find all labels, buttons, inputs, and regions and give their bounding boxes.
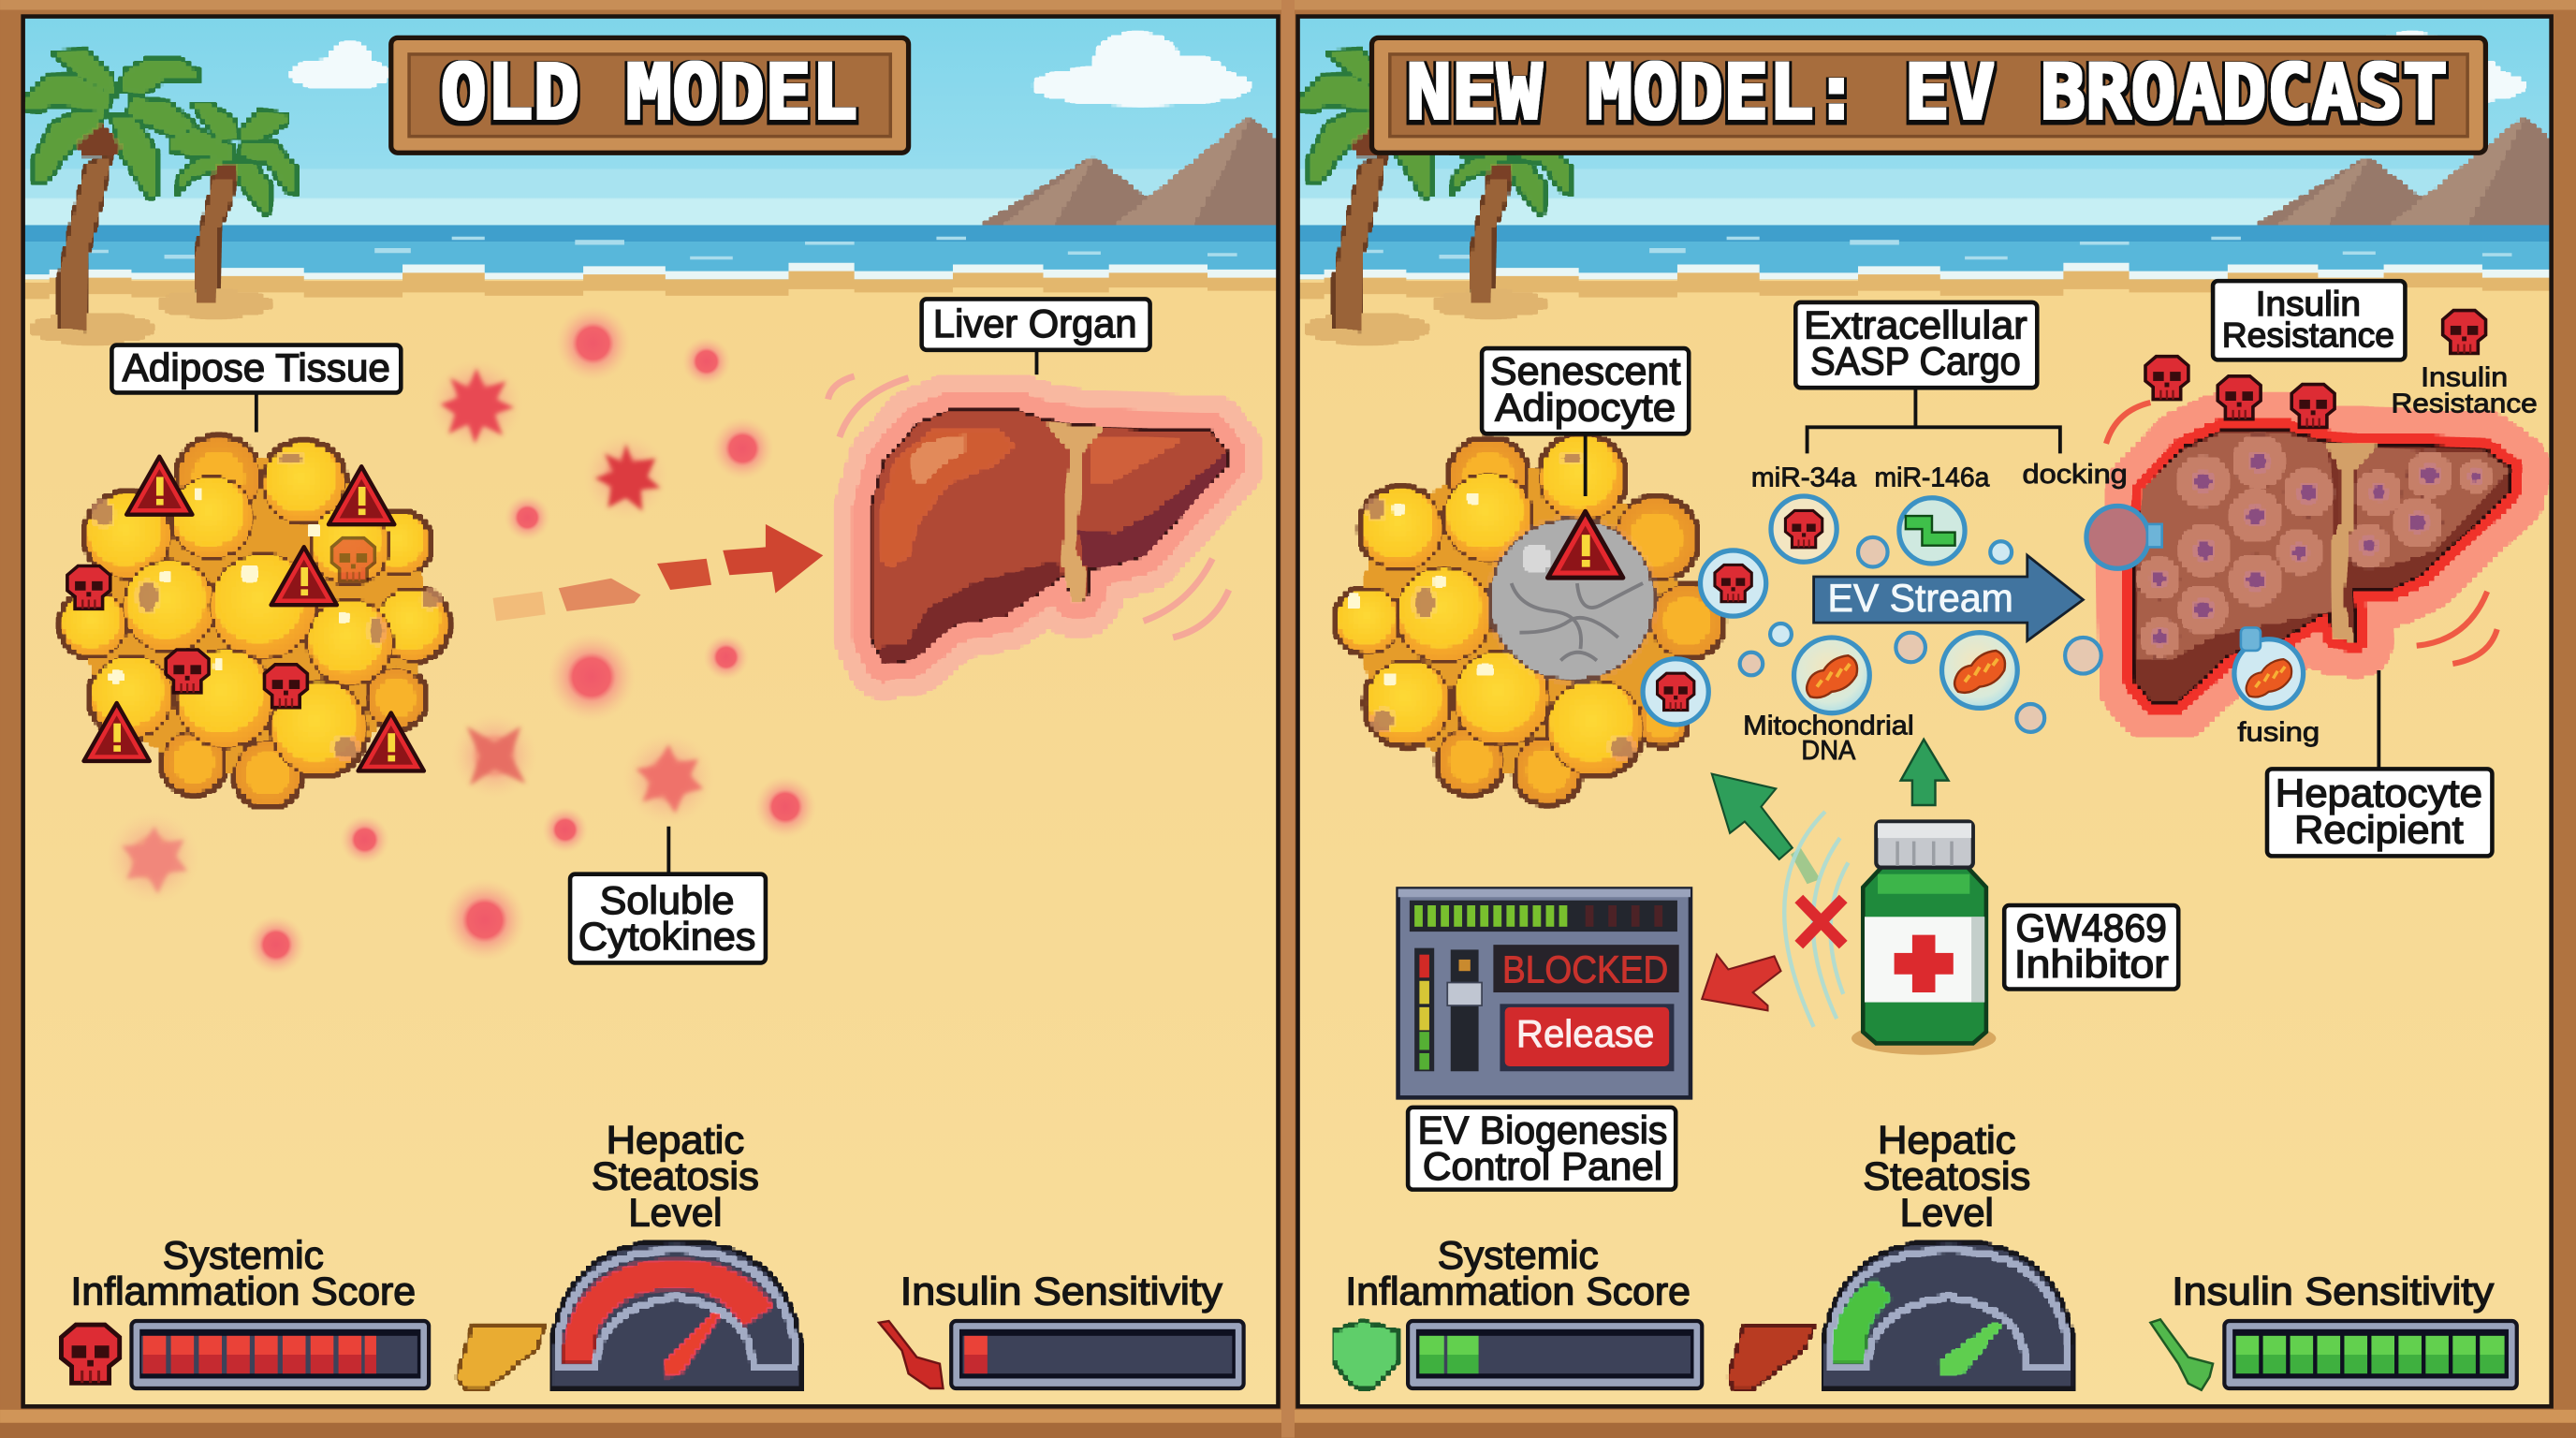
insulin bar: [951, 1321, 1244, 1388]
hud: insulin sensitivity (new): [2150, 1269, 2517, 1390]
hud: systemic inflammation score (new): Systemic: [1438, 1233, 1599, 1277]
senescent grey cell: [1490, 520, 1654, 681]
cargo labels: miR-146a: [1875, 462, 1990, 492]
cargo labels: Mitochondrial: [1743, 711, 1914, 741]
panel: new model: [1275, 17, 2576, 1413]
red X block mark: [1799, 899, 1843, 945]
label: insulin resistance text: Resistance: [2392, 389, 2538, 419]
beach background: [0, 17, 1347, 1413]
fusing vesicle: [2234, 627, 2304, 708]
skull icons over liver: [2145, 311, 2486, 427]
label: soluble cytokines: Soluble: [600, 878, 735, 922]
hud: hepatic steatosis gauge (new): Hepatic: [1878, 1118, 2015, 1162]
warning icon: [1547, 511, 1623, 578]
title: new model: NEW MODEL: EV BROADCAST: [1406, 49, 2448, 137]
label: hepatocyte recipient: Hepatocyte: [2276, 771, 2482, 815]
hud: hepatic steatosis gauge (old): Level: [628, 1190, 722, 1234]
label: EV biogenesis control panel: Control Panel: [1423, 1144, 1662, 1188]
label: GW4869 inhibitor: [2004, 905, 2178, 990]
label: soluble cytokines: [570, 827, 766, 962]
panel: old model: [0, 17, 1347, 1413]
EV stream arrow: EV Stream: [1828, 577, 2013, 620]
cargo labels: docking: [2022, 460, 2128, 490]
vesicle: miR-34a skull: [1771, 496, 1837, 562]
arrow: green diagonal to adipocyte: [1712, 774, 1821, 884]
label: GW4869 inhibitor: Inhibitor: [2014, 942, 2169, 986]
slider: [1447, 949, 1482, 1071]
vesicle: skull: [1701, 550, 1766, 616]
label: adipose tissue: Adipose Tissue: [123, 345, 390, 389]
hud: insulin sensitivity (old): [879, 1269, 1244, 1388]
icon: healthy liver: [1730, 1328, 1812, 1388]
motion lines: liver: [828, 376, 1229, 638]
cargo labels: [1743, 460, 2320, 766]
liver organ (old model): [871, 411, 1227, 664]
docking vesicle: [2086, 506, 2162, 568]
senescent adipocyte cluster: [1336, 433, 1723, 803]
hud: systemic inflammation score (old): Systemic: [163, 1233, 324, 1277]
hud: hepatic steatosis gauge (old): Hepatic: [607, 1118, 744, 1162]
leader line: [1585, 433, 1587, 496]
needle: [666, 1313, 720, 1377]
warning icon: [83, 703, 150, 761]
label: hepatocyte recipient: [2267, 670, 2492, 856]
LED bar: [1410, 901, 1677, 932]
gauge: [552, 1242, 800, 1388]
grey cell creases: [1512, 583, 1643, 661]
title: old model: OLD MODEL: [440, 49, 857, 137]
hud: hepatic steatosis gauge (old): Steatosis: [592, 1154, 759, 1198]
gauge: [1823, 1242, 2073, 1388]
beach background: [1275, 17, 2576, 1413]
icon: skull: [61, 1325, 120, 1383]
small vesicles: [1740, 537, 2101, 732]
warning icon: [359, 712, 424, 770]
skull icon: [265, 665, 307, 708]
fat cells: [1336, 435, 1723, 803]
hud: insulin sensitivity (new): Insulin Sensitivity: [2172, 1269, 2494, 1313]
skull icon: [166, 650, 209, 693]
dashed arrow: cytokines to liver: [493, 524, 823, 621]
arrow: red blocked release: [1702, 955, 1781, 1010]
warning icon: [329, 466, 394, 524]
label: EV biogenesis control panel: [1408, 1108, 1676, 1190]
vesicle: mitochondrial DNA: [1942, 633, 2017, 708]
hud: hepatic steatosis gauge (new): Steatosis: [1863, 1154, 2030, 1198]
label: insulin resistance text: Insulin: [2421, 362, 2508, 392]
release button: Release: [1516, 1012, 1654, 1055]
hud: hepatic steatosis gauge (new): Level: [1900, 1190, 1994, 1234]
blocked display: BLOCKED: [1502, 948, 1668, 991]
inflammation bar: [131, 1321, 429, 1388]
label: GW4869 inhibitor: GW4869: [2015, 906, 2167, 950]
label: extracellular SASP cargo: SASP Cargo: [1810, 339, 2021, 383]
arrow: green up: [1901, 740, 1949, 805]
soluble cytokines particles: [107, 305, 816, 975]
label: extracellular SASP cargo: Extracellular: [1804, 303, 2027, 347]
hud: systemic inflammation score (old): [61, 1233, 429, 1388]
skull icon: [67, 565, 110, 609]
motion lines: inflamed liver: [2106, 403, 2497, 664]
label: senescent adipocyte: Adipocyte: [1495, 385, 1676, 429]
warning icon: [126, 457, 192, 515]
waves: inhibitor block: [1784, 812, 1848, 1027]
icon: down arrow: [879, 1321, 943, 1388]
label: liver organ: Liver Organ: [933, 301, 1137, 345]
cargo labels: miR-34a: [1751, 462, 1857, 492]
label: insulin resistance text: [2392, 362, 2538, 419]
skull icon: [2443, 311, 2486, 353]
icon: shield: [1334, 1323, 1397, 1388]
hepatocyte cells: [2137, 435, 2492, 657]
cargo labels: DNA: [1801, 736, 1856, 766]
skull icon: [2145, 357, 2188, 400]
hud: systemic inflammation score (old): Inflammation Score: [71, 1269, 416, 1313]
hud: hepatic steatosis gauge (new): [1730, 1118, 2073, 1388]
liver: hepatocyte recipient (new model): [2134, 431, 2511, 701]
hud: systemic inflammation score (new): Inflammation Score: [1345, 1269, 1690, 1313]
EV stream arrow: [1814, 555, 2083, 640]
icon: up arrow: [2150, 1319, 2213, 1390]
vesicle: skull: [1643, 659, 1708, 725]
vesicle: mitochondrial DNA: [1794, 638, 1869, 713]
label: extracellular SASP cargo: [1795, 302, 2060, 453]
fat cells: [61, 437, 448, 807]
vesicle: miR-146a RNA: [1899, 498, 1965, 564]
label: adipose tissue: [111, 345, 401, 433]
warning icon: [271, 547, 337, 605]
icon: fatty liver: [459, 1328, 542, 1388]
label: soluble cytokines: Cytokines: [578, 914, 755, 958]
EV biogenesis control panel: [1398, 888, 1690, 1097]
title: old model: [391, 37, 909, 153]
insulin bar: [2224, 1321, 2517, 1388]
skull icon: [2291, 385, 2334, 427]
EV vesicles: [1643, 496, 2101, 732]
label: insulin resistance box: [2213, 281, 2405, 360]
label: senescent adipocyte: [1482, 348, 1689, 433]
side indicator lights: [1414, 948, 1434, 1071]
cargo labels: fusing: [2237, 718, 2320, 748]
adipose tissue cluster: [61, 437, 448, 807]
hud: insulin sensitivity (old): Insulin Sensitivity: [900, 1269, 1222, 1313]
label: insulin resistance box: Resistance: [2222, 315, 2394, 354]
hud: hepatic steatosis gauge (old): [459, 1118, 800, 1388]
label: hepatocyte recipient: Recipient: [2294, 807, 2464, 851]
label: senescent adipocyte: Senescent: [1490, 349, 1681, 393]
label: liver organ: [922, 299, 1150, 374]
hud: systemic inflammation score (new): [1334, 1233, 1702, 1388]
release button: [1500, 1004, 1674, 1071]
needle: [1939, 1323, 2001, 1377]
label: insulin resistance box: Insulin: [2256, 285, 2361, 323]
inflammation bar: [1408, 1321, 1702, 1388]
GW4869 vial: [1852, 822, 1996, 1055]
skull icon: [2217, 376, 2261, 419]
label: EV biogenesis control panel: EV Biogenesis: [1418, 1108, 1667, 1152]
skull icon (faded): [331, 538, 374, 581]
